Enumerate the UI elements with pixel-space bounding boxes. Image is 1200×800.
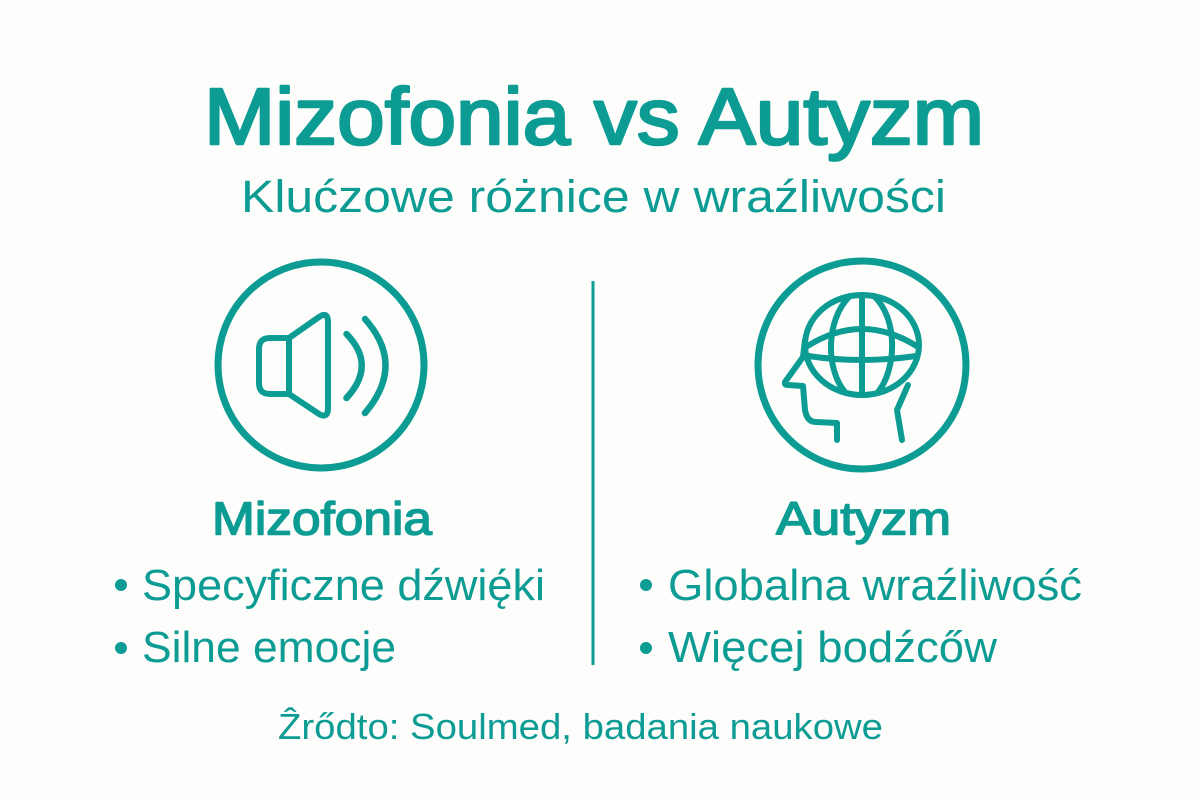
heading: Mizofonia: Mizofonia (212, 492, 432, 544)
bullet: Specyficzne dźwięki: Specyficzne dźwię́ki (142, 561, 545, 610)
title: Mizofonia vs Autyzm (204, 72, 984, 161)
bullet: Silne emocje: Silne emocje (142, 623, 396, 672)
subtitle: Klućzowe różnice w wraźliwości (241, 171, 946, 222)
panel: Mizofonia (115, 262, 545, 672)
icon: speaker in circle (218, 262, 424, 468)
source note: Ẑrődto: Soulmed, badania naukowe (278, 706, 883, 747)
icon: head with globe in circle (758, 261, 966, 469)
divider (592, 281, 594, 665)
bullet: Globalna wraźliwość: Globalna wraźliwość (668, 561, 1082, 610)
heading: Autyzm: Autyzm (776, 492, 951, 544)
bullet: Więcej bodźcőw: Więcej bodźcőw (668, 623, 997, 672)
panel: Autyzm (640, 261, 1082, 672)
